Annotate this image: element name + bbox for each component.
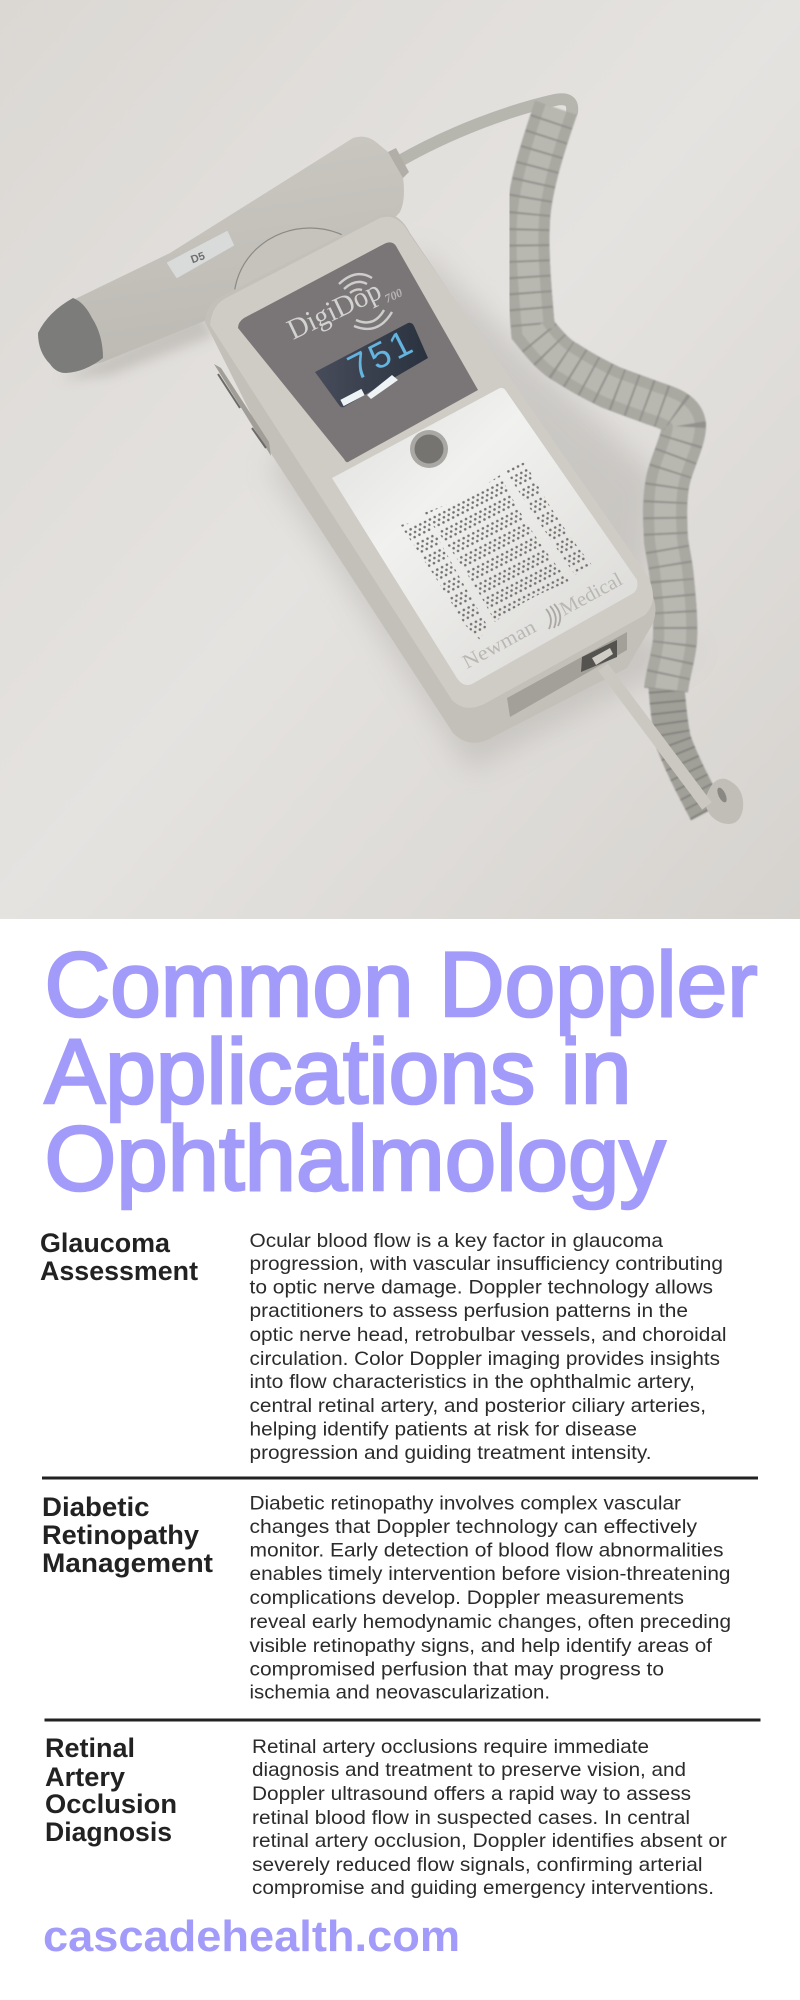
body text: circulation. Color Doppler imaging provides insights (250, 1348, 720, 1370)
body text: Diabetic retinopathy involves complex vascular (250, 1492, 682, 1514)
body text: retinal artery occlusion, Doppler identifies absent or (252, 1830, 728, 1852)
section: retinal artery occlusion diagnosis (45, 1733, 728, 1899)
dark display panel (238, 242, 478, 462)
section: diabetic retinopathy management (42, 1492, 731, 1704)
heading: Assessment (40, 1256, 198, 1286)
title: Ophthalmology (44, 1108, 666, 1210)
body text: Doppler ultrasound offers a rapid way to assess (252, 1783, 691, 1805)
body text: central retinal artery, and posterior ciliary arteries, (250, 1395, 706, 1417)
device lower shell (205, 214, 656, 743)
heading: Retinal (45, 1733, 135, 1763)
brand Newman Medical: Newman (459, 616, 540, 673)
body text: compromise and guiding emergency interventions. (252, 1877, 714, 1899)
heading (42, 1492, 213, 1578)
heading: Occlusion (45, 1789, 177, 1819)
body text: ischemia and neovascularization. (250, 1682, 550, 1704)
probe label: D5 (189, 250, 207, 266)
body text (250, 1230, 726, 1464)
body text: retinal blood flow in suspected cases. In central (252, 1807, 690, 1829)
brand Newman Medical (459, 568, 627, 673)
body text: compromised perfusion that may progress to (250, 1658, 664, 1680)
body text: severely reduced flow signals, confirming arterial (252, 1854, 702, 1876)
section: glaucoma assessment (40, 1228, 726, 1464)
body text: progression and guiding treatment intensity. (250, 1442, 652, 1464)
body text: visible retinopathy signs, and help identify areas of (250, 1635, 713, 1657)
body text: diagnosis and treatment to preserve vision, and (252, 1759, 686, 1781)
probe handle (38, 137, 404, 373)
body text: to optic nerve damage. Doppler technology allows (250, 1276, 713, 1298)
device shadow (270, 250, 700, 770)
cord loop end (705, 779, 743, 824)
probe label (168, 232, 233, 277)
heading: Management (42, 1548, 213, 1578)
heading: Artery (45, 1762, 125, 1792)
body text (250, 1492, 731, 1704)
photo backdrop (0, 0, 800, 919)
photo: handheld Doppler device (0, 0, 800, 919)
title (44, 934, 758, 1210)
LCD bars (342, 375, 398, 403)
body text: complications develop. Doppler measurements (250, 1587, 684, 1609)
grille left strip (400, 520, 487, 640)
heading (45, 1733, 177, 1847)
brand model number: 700 (382, 285, 405, 306)
body text: monitor. Early detection of blood flow abnormalities (250, 1540, 724, 1562)
brand DigiDop: DigiDop (282, 274, 386, 346)
body text: progression, with vascular insufficiency contributing (250, 1253, 723, 1275)
logo arcs (546, 604, 560, 629)
signal arcs (339, 274, 392, 329)
body text: changes that Doppler technology can effectively (250, 1516, 697, 1538)
probe disc mount (234, 228, 386, 372)
body text: Ocular blood flow is a key factor in glaucoma (250, 1230, 663, 1252)
body text: into flow characteristics in the ophthalmic artery, (250, 1371, 695, 1393)
bottom port recess (507, 632, 627, 717)
body text: optic nerve head, retrobulbar vessels, and choroidal (250, 1324, 726, 1346)
connector and straight cord (581, 640, 707, 806)
device top face (210, 217, 653, 708)
brand Newman Medical: Medical (556, 568, 627, 620)
title: Applications in (44, 1021, 632, 1123)
probe tip (38, 298, 103, 373)
LCD reading: 751 (341, 322, 418, 388)
heading: Glaucoma (40, 1228, 171, 1258)
body text: practitioners to assess perfusion patterns in the (250, 1300, 688, 1322)
body text (252, 1736, 728, 1899)
LCD screen (315, 322, 428, 407)
probe collar (388, 148, 409, 178)
speaker grille (400, 462, 592, 640)
probe shadow (60, 310, 215, 380)
heading: Diabetic (42, 1492, 150, 1522)
heading (40, 1228, 198, 1286)
body text: Retinal artery occlusions require immediate (252, 1736, 649, 1758)
heading: Diagnosis (45, 1817, 172, 1847)
coiled cord (527, 108, 707, 812)
side buttons (214, 364, 271, 456)
heading: Retinopathy (42, 1520, 199, 1550)
footer website: cascadehealth.com (43, 1912, 460, 1961)
grille right strip (505, 462, 592, 575)
title: Common Doppler (44, 934, 758, 1036)
body text: enables timely intervention before vision-threatening (250, 1563, 730, 1585)
cable from probe (398, 99, 572, 162)
silver plate (332, 388, 637, 685)
body text: helping identify patients at risk for disease (250, 1418, 637, 1440)
body text: reveal early hemodynamic changes, often preceding (250, 1611, 731, 1633)
power button (410, 430, 448, 468)
